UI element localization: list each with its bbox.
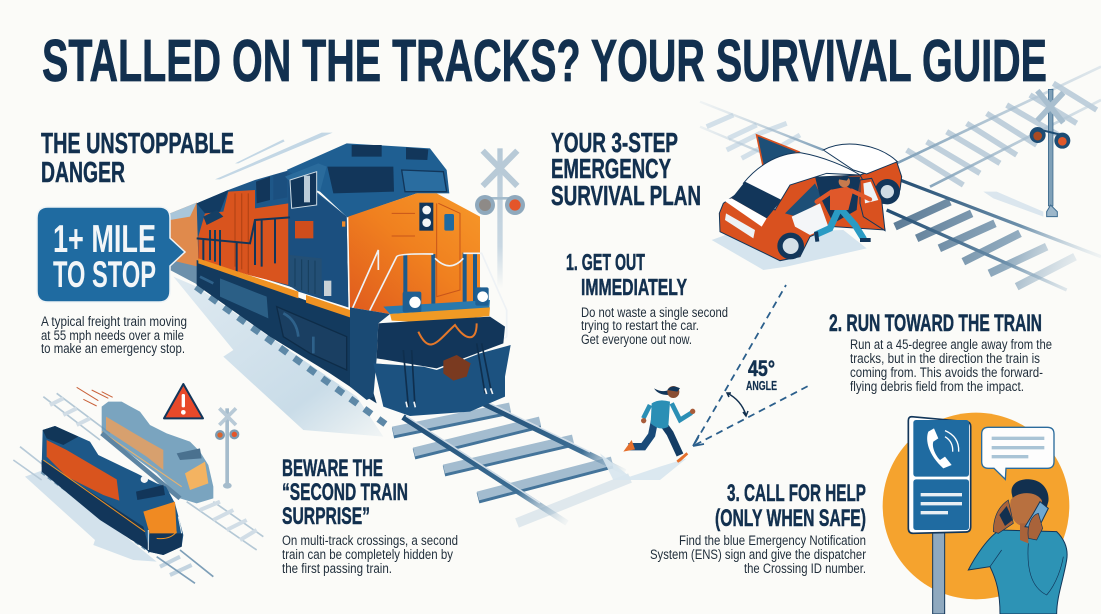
heading xyxy=(566,249,687,300)
open front door xyxy=(860,178,885,231)
angle arc xyxy=(727,393,748,416)
heading: SURPRISE” xyxy=(282,503,370,530)
body text: Run at a 45-degree angle away from the xyxy=(850,337,1052,352)
heading: IMMEDIATELY xyxy=(581,274,687,300)
body text: System (ENS) sign and give the dispatcher xyxy=(650,547,866,562)
panel: beware the second train surprise xyxy=(282,455,458,576)
car hood xyxy=(823,144,902,204)
heading xyxy=(715,480,866,532)
main track foreground xyxy=(393,402,630,523)
underframe xyxy=(197,260,377,403)
illustration: upper-right crossing tracks xyxy=(700,67,1101,290)
side windows xyxy=(785,183,823,217)
panel: step 2 run toward the train xyxy=(829,310,1052,394)
callout: 1+ MILE xyxy=(53,218,156,261)
body text: flying debris field from the impact. xyxy=(850,379,1024,394)
orange stripe xyxy=(198,258,298,298)
body text: trying to restart the car. xyxy=(581,318,699,333)
open rear door xyxy=(757,135,798,167)
ENS sign xyxy=(908,417,971,533)
heading: THE UNSTOPPABLE xyxy=(41,128,234,160)
body text: the Crossing ID number. xyxy=(744,561,866,576)
heading: (ONLY WHEN SAFE) xyxy=(715,505,866,532)
body text xyxy=(650,533,866,576)
icon: warning triangle xyxy=(164,384,203,418)
front grab rails xyxy=(405,253,475,307)
person on phone xyxy=(968,479,1067,614)
body text: coming from. This avoids the forward- xyxy=(850,365,1043,380)
front track xyxy=(13,447,213,583)
body text: tracks, but in the direction the train is xyxy=(850,351,1040,366)
body text: Find the blue Emergency Notification xyxy=(679,533,866,548)
angle label xyxy=(746,356,777,393)
body text: On multi-track crossings, a second xyxy=(282,533,458,548)
body text: at 55 mph needs over a mile xyxy=(41,328,184,343)
cab roof xyxy=(287,143,449,217)
back train xyxy=(102,402,213,503)
long hood xyxy=(197,170,348,307)
front orange nose xyxy=(348,193,489,314)
heading: BEWARE THE xyxy=(282,455,383,482)
panel: three-step heading xyxy=(551,127,701,211)
illustration: two trains at a crossing xyxy=(13,384,263,583)
blue ledge xyxy=(383,300,490,314)
panel: three-step heading: YOUR 3-STEP xyxy=(551,127,678,158)
head lights xyxy=(419,203,433,231)
side window xyxy=(290,172,317,208)
diagram: 45 degree escape angle xyxy=(693,285,810,446)
body text: A typical freight train moving xyxy=(41,314,187,329)
illustration: person calling from ENS sign xyxy=(883,413,1069,614)
back track xyxy=(43,393,263,550)
car body xyxy=(719,175,885,261)
rear wheel xyxy=(777,233,804,259)
sign pole xyxy=(933,533,945,614)
body text: Do not waste a single second xyxy=(581,305,728,320)
panel: the unstoppable danger xyxy=(37,128,234,356)
body text xyxy=(581,305,728,347)
heading line two: DANGER xyxy=(41,157,125,189)
rear locomotive xyxy=(170,203,207,285)
dashed escape lines xyxy=(695,285,810,445)
body text: train can be completely hidden by xyxy=(282,547,453,562)
heading: 1. GET OUT xyxy=(566,249,645,275)
plow xyxy=(373,345,511,416)
body text xyxy=(41,314,187,356)
angle label: ANGLE xyxy=(746,379,777,393)
heading: 3. CALL FOR HELP xyxy=(727,480,866,507)
orange circle xyxy=(883,413,1069,599)
body text xyxy=(282,533,458,576)
callout xyxy=(37,207,185,302)
body text: Get everyone out now. xyxy=(581,332,692,347)
callout: TO STOP xyxy=(53,254,156,295)
front train xyxy=(42,426,183,555)
illustration: crossing signal xyxy=(475,148,525,288)
body text xyxy=(850,337,1052,394)
windshields xyxy=(327,167,394,193)
panel: step 3 call for help xyxy=(650,480,866,576)
illustration: train shadow and side track xyxy=(173,133,387,437)
illustration: upper-right crossing signal xyxy=(983,89,1070,217)
heading xyxy=(282,455,408,530)
angle label: 45° xyxy=(748,356,775,381)
illustration: main freight train xyxy=(170,143,511,416)
rear window xyxy=(732,182,782,218)
heading: “SECOND TRAIN xyxy=(282,479,408,506)
orange bumper xyxy=(390,307,490,323)
car shadow xyxy=(712,230,867,270)
panel: step 1 get out xyxy=(566,249,728,347)
illustration: car stalled on tracks with person xyxy=(712,135,902,270)
handrail side xyxy=(197,217,290,277)
car roof xyxy=(743,153,860,210)
speech bubble xyxy=(982,427,1054,479)
orange long side xyxy=(198,190,288,285)
panel: three-step heading: SURVIVAL PLAN xyxy=(551,180,701,211)
speed lines xyxy=(77,387,113,406)
icon: small crossing signal xyxy=(215,408,239,489)
body text: to make an emergency stop. xyxy=(41,341,185,356)
illustration: running person xyxy=(600,386,695,480)
panel: three-step heading: EMERGENCY xyxy=(551,153,671,184)
person escaping xyxy=(816,176,871,242)
body text: the first passing train. xyxy=(282,561,392,576)
lower front xyxy=(350,307,390,400)
